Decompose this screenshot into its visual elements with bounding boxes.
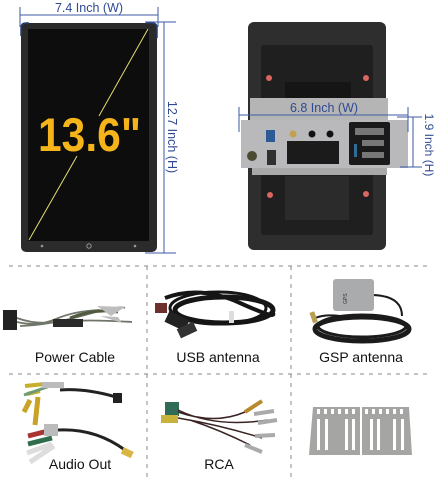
dimension: front width: 7.4 Inch (W) [55,1,123,15]
ports [266,130,275,142]
item: GPS antenna [309,279,409,365]
dimension: rear height: 1.9 Inch (H) [422,114,436,176]
item: GPS antenna: GSP antenna [319,349,403,365]
dimension: front width [20,1,158,27]
nav buttons [41,244,136,248]
icon: USB cable [155,292,273,338]
icon: audio cables [24,382,134,462]
item: RCA: RCA [204,456,234,472]
item: power cable: Power Cable [35,349,115,365]
icon: RCA cables [161,401,277,452]
item: mounting brackets [309,407,412,455]
rear bracket [250,98,388,120]
icon: power cable [3,306,132,330]
item: USB antenna: USB antenna [176,349,260,365]
red screws [266,75,369,198]
screen size label: 13.6" [38,108,141,161]
item: audio out [24,382,134,472]
panel: front of tablet [21,23,157,252]
panel: back of unit [241,22,408,250]
item: USB antenna [155,292,273,365]
diagonal line [29,29,148,240]
dimension: front height [145,22,179,253]
dimension: rear width: 6.8 Inch (W) [290,101,358,115]
dimension: rear width [239,101,408,132]
item: power cable [3,306,132,365]
dimension: front height: 12.7 Inch (H) [165,101,179,173]
item: RCA [161,401,277,472]
dimension: rear height [397,114,436,176]
item: audio out: Audio Out [49,456,111,472]
icon: GPS antenna: GPS [343,293,349,304]
